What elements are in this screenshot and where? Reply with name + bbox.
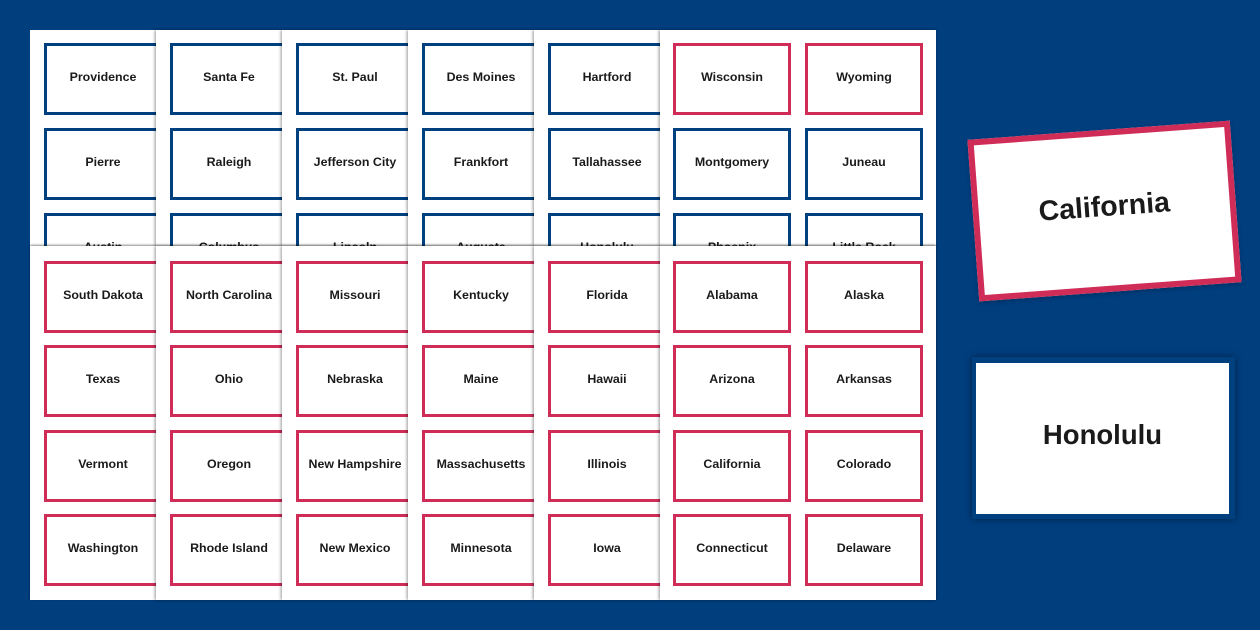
card bbox=[673, 128, 791, 200]
card bbox=[673, 430, 791, 502]
card bbox=[170, 514, 288, 586]
card bbox=[170, 128, 288, 200]
capital card: Honolulu bbox=[972, 357, 1235, 519]
card bbox=[673, 213, 791, 285]
card bbox=[296, 213, 414, 285]
card bbox=[170, 261, 288, 333]
card bbox=[673, 261, 791, 333]
strip 2 bbox=[156, 246, 282, 600]
card: Wyoming bbox=[836, 70, 892, 84]
top sheet: capital city cards bbox=[30, 30, 936, 246]
strip 5 bbox=[534, 30, 660, 246]
card bbox=[44, 430, 162, 502]
card bbox=[673, 43, 791, 115]
strip 4 bbox=[408, 30, 534, 246]
card bbox=[44, 345, 162, 417]
card: Pierre bbox=[85, 155, 121, 169]
card bbox=[422, 514, 540, 586]
card: Alabama bbox=[706, 288, 758, 302]
card: Florida bbox=[586, 288, 628, 302]
card bbox=[296, 514, 414, 586]
card: Santa Fe bbox=[203, 70, 255, 84]
card bbox=[805, 261, 923, 333]
card bbox=[296, 261, 414, 333]
card: Arizona bbox=[709, 372, 755, 386]
card: Washington bbox=[68, 541, 138, 555]
card: Frankfort bbox=[454, 155, 508, 169]
card bbox=[296, 345, 414, 417]
card bbox=[673, 345, 791, 417]
card: Iowa bbox=[593, 541, 621, 555]
card bbox=[422, 213, 540, 285]
card bbox=[170, 213, 288, 285]
card: Colorado bbox=[837, 457, 891, 471]
strip 1 bbox=[30, 30, 156, 246]
card: Jefferson City bbox=[314, 155, 396, 169]
card: California bbox=[703, 457, 761, 471]
card bbox=[548, 430, 666, 502]
card bbox=[548, 514, 666, 586]
strip 6 bbox=[660, 246, 936, 600]
card: St. Paul bbox=[332, 70, 378, 84]
strip 3 bbox=[282, 246, 408, 600]
card bbox=[673, 514, 791, 586]
card bbox=[548, 128, 666, 200]
card: Hawaii bbox=[587, 372, 627, 386]
card: Vermont bbox=[78, 457, 128, 471]
card bbox=[296, 430, 414, 502]
card bbox=[548, 261, 666, 333]
card bbox=[805, 128, 923, 200]
tilted state card: California bbox=[967, 120, 1241, 301]
card: Minnesota bbox=[450, 541, 512, 555]
card bbox=[422, 128, 540, 200]
card: Massachusetts bbox=[437, 457, 525, 471]
card bbox=[805, 43, 923, 115]
card bbox=[805, 430, 923, 502]
card bbox=[422, 430, 540, 502]
card bbox=[170, 430, 288, 502]
bottom sheet: state cards bbox=[30, 246, 936, 600]
card bbox=[805, 345, 923, 417]
card: Connecticut bbox=[696, 541, 768, 555]
card bbox=[44, 514, 162, 586]
card: Illinois bbox=[587, 457, 627, 471]
card: Alaska bbox=[844, 288, 884, 302]
card: Ohio bbox=[215, 372, 243, 386]
card: Delaware bbox=[837, 541, 891, 555]
card bbox=[422, 43, 540, 115]
card bbox=[44, 43, 162, 115]
tilted state card: California: California bbox=[1037, 186, 1170, 227]
card: Hartford bbox=[583, 70, 631, 84]
card: Juneau bbox=[842, 155, 886, 169]
card: Des Moines bbox=[447, 70, 515, 84]
card bbox=[170, 43, 288, 115]
card bbox=[44, 213, 162, 285]
strip 3 bbox=[282, 30, 408, 246]
card: Maine bbox=[463, 372, 499, 386]
card: North Carolina bbox=[186, 288, 272, 302]
card: Tallahassee bbox=[572, 155, 642, 169]
card bbox=[422, 261, 540, 333]
card: New Mexico bbox=[320, 541, 390, 555]
card bbox=[44, 261, 162, 333]
card bbox=[548, 213, 666, 285]
card bbox=[170, 345, 288, 417]
strip 5 bbox=[534, 246, 660, 600]
card: South Dakota bbox=[63, 288, 143, 302]
card bbox=[44, 128, 162, 200]
card bbox=[805, 213, 923, 285]
card bbox=[548, 345, 666, 417]
card: Nebraska bbox=[327, 372, 383, 386]
card bbox=[296, 128, 414, 200]
card: Wisconsin bbox=[701, 70, 763, 84]
card: Providence bbox=[70, 70, 136, 84]
card bbox=[296, 43, 414, 115]
strip 4 bbox=[408, 246, 534, 600]
card: Arkansas bbox=[836, 372, 892, 386]
capital card: Honolulu: Honolulu bbox=[1043, 419, 1162, 450]
card: Rhode Island bbox=[190, 541, 268, 555]
card: Montgomery bbox=[695, 155, 769, 169]
card: Texas bbox=[86, 372, 120, 386]
strip 1 bbox=[30, 246, 156, 600]
card: Oregon bbox=[207, 457, 251, 471]
card: Missouri bbox=[330, 288, 380, 302]
card: Raleigh bbox=[207, 155, 251, 169]
card: Kentucky bbox=[453, 288, 509, 302]
strip 2 bbox=[156, 30, 282, 246]
card bbox=[805, 514, 923, 586]
card bbox=[548, 43, 666, 115]
card: New Hampshire bbox=[309, 457, 401, 471]
card bbox=[422, 345, 540, 417]
strip 6 bbox=[660, 30, 936, 246]
